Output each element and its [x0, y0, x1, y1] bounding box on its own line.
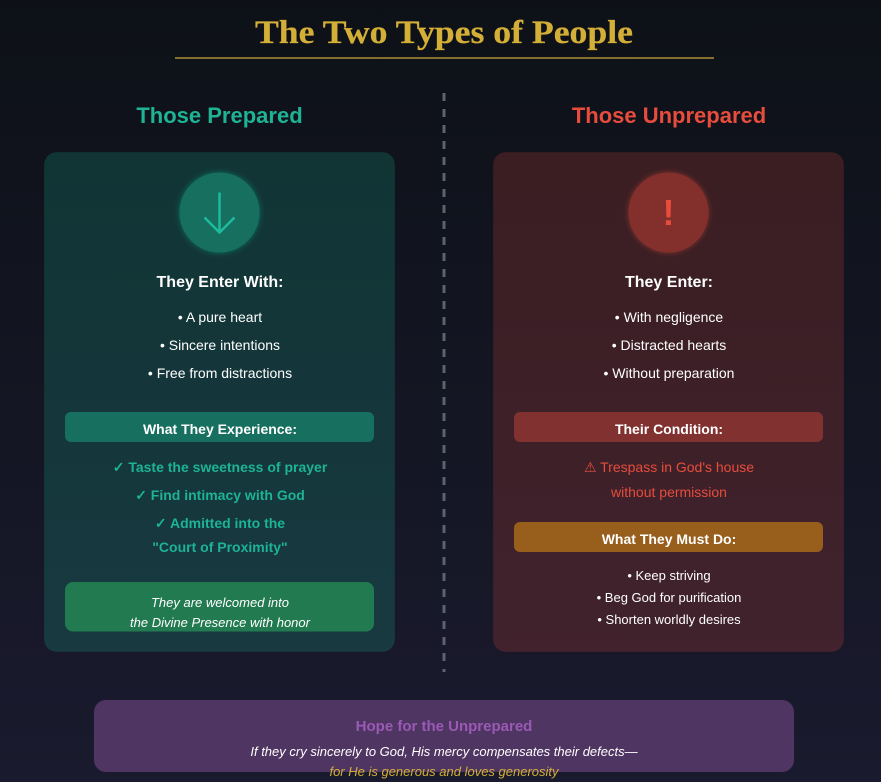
experience list: ✓ Find intimacy with God: [135, 487, 305, 503]
must-do list: [597, 568, 741, 627]
icon: down arrow: [180, 172, 260, 252]
experience list: ✓ Taste the sweetness of prayer: [113, 459, 328, 475]
experience list: ✓ Admitted into the: [155, 515, 285, 531]
panel: those unprepared: [494, 152, 844, 652]
enter-with list: They Enter With:: [157, 274, 283, 291]
panel: hope for the unprepared: If they cry sincerely to God, His mercy compensates their defects—: [250, 744, 639, 759]
icon: exclamation: !: [662, 192, 674, 233]
banner: their condition: [514, 412, 823, 442]
heading: those prepared: Those Prepared: [136, 103, 303, 128]
panel: hope for the unprepared: [94, 700, 794, 779]
title: The Two Types of People: [255, 15, 633, 51]
must-do list: • Keep striving: [627, 568, 711, 583]
banner: what they experience: What They Experience:: [143, 421, 297, 437]
enter list: • Without preparation: [604, 365, 734, 381]
must-do list: • Beg God for purification: [597, 590, 741, 605]
center dashed divider: [442, 93, 446, 672]
enter-with list: • Sincere intentions: [160, 337, 280, 353]
enter list: • Distracted hearts: [612, 337, 726, 353]
condition warning: without permission: [610, 484, 727, 500]
banner: what they must do: What They Must Do:: [602, 531, 736, 547]
enter list: • With negligence: [615, 309, 723, 325]
heading: those unprepared: Those Unprepared: [572, 103, 766, 128]
banner: their condition: Their Condition:: [615, 421, 723, 437]
condition warning: [584, 459, 754, 500]
enter list: [604, 274, 734, 381]
icon: exclamation: [628, 172, 708, 252]
condition warning: ⚠ Trespass in God's house: [584, 459, 754, 475]
panel: those prepared: [44, 152, 394, 652]
callout: welcomed: [65, 582, 374, 632]
must-do list: • Shorten worldly desires: [597, 612, 741, 627]
panel: hope for the unprepared: for He is generous and loves generosity: [329, 764, 560, 779]
enter-with list: • Free from distractions: [148, 365, 292, 381]
panel: hope for the unprepared: Hope for the Unprepared: [356, 718, 532, 735]
banner: what they experience: [65, 412, 374, 442]
enter-with list: • A pure heart: [178, 309, 262, 325]
enter-with list: [148, 274, 292, 381]
banner: what they must do: [514, 522, 823, 552]
callout: welcomed: the Divine Presence with honor: [130, 615, 311, 630]
enter list: They Enter:: [625, 274, 713, 291]
experience list: [113, 459, 328, 555]
experience list: "Court of Proximity": [152, 539, 288, 555]
callout: welcomed: They are welcomed into: [151, 595, 289, 610]
